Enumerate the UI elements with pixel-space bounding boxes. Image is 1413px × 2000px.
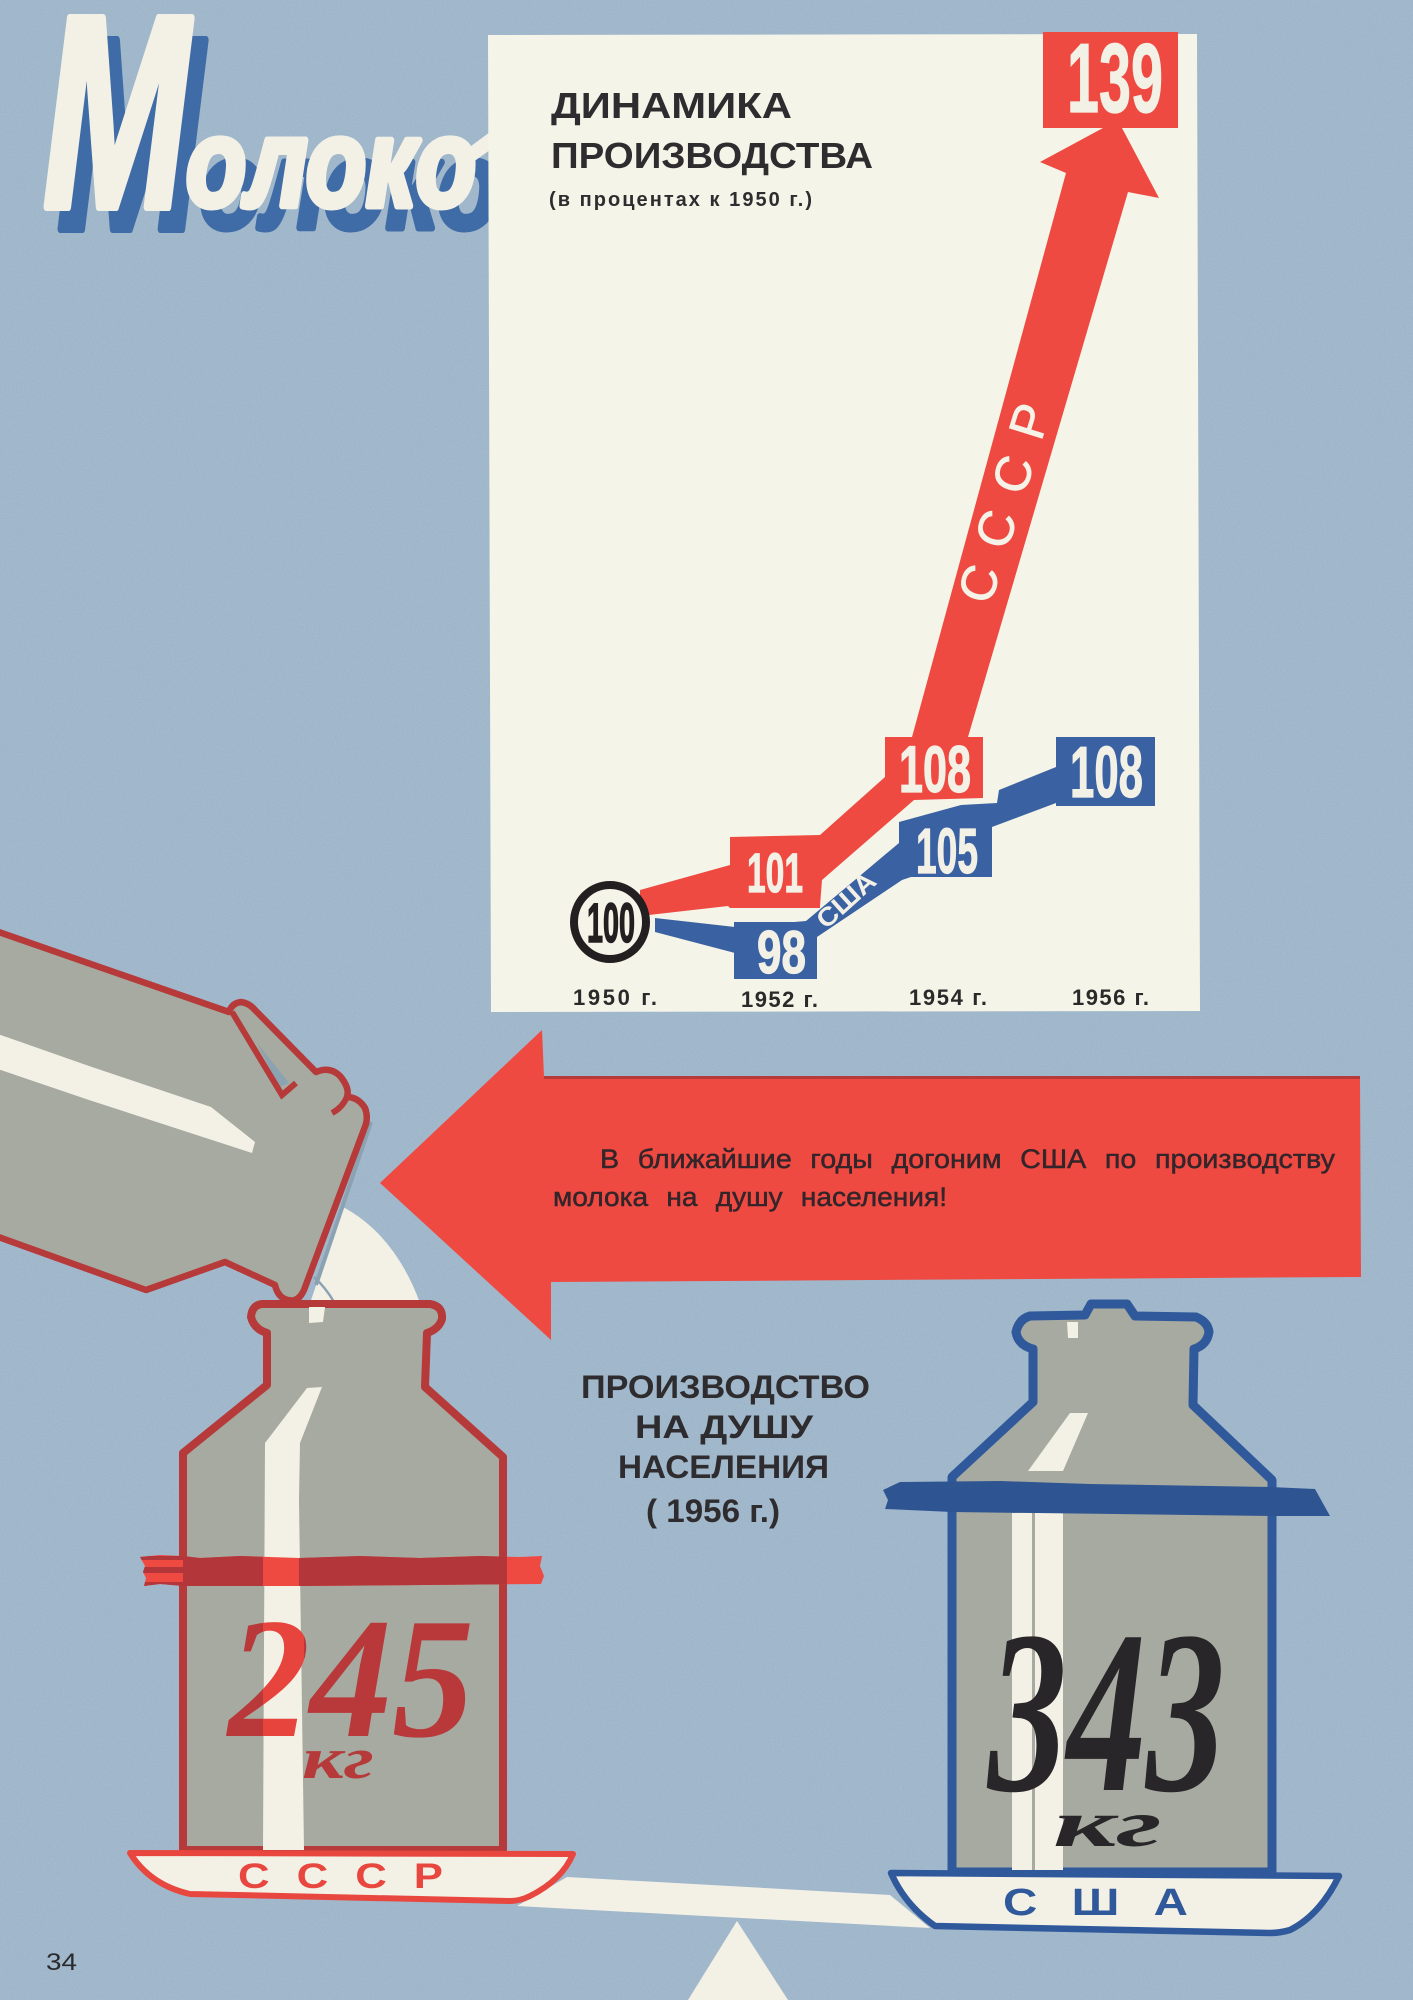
jar body [183, 1304, 503, 1850]
chart: USA line [655, 733, 1155, 986]
balance fulcrum [688, 1921, 788, 2000]
page number: 34 [46, 1949, 77, 1976]
thumb gap [257, 1043, 289, 1087]
per-capita production label: ( 1956 г.) [646, 1493, 780, 1529]
year axis labels: 1954 г. [909, 985, 987, 1010]
USSR plate [130, 1853, 573, 1901]
USSR value 101 [730, 837, 820, 908]
USA value 108 [1056, 733, 1155, 813]
per-capita production label [581, 1369, 870, 1529]
USSR band and arrow [640, 128, 1159, 916]
red slogan arrow [380, 1030, 1361, 1340]
per-capita production label: НАСЕЛЕНИЯ [618, 1449, 829, 1485]
balance beam [517, 1877, 930, 1928]
value 245: 245 [225, 1584, 474, 1774]
title shadow [57, 0, 500, 287]
start marker 100 [574, 885, 646, 959]
USSR plate: СССР [238, 1857, 443, 1896]
slogan text [553, 1144, 1336, 1212]
USA value 105: 105 [916, 815, 978, 887]
unit kg: кг [1053, 1788, 1162, 1861]
USA label: США [810, 865, 882, 934]
chart: USSR line [640, 23, 1178, 916]
USSR value 108 [885, 732, 983, 806]
USA value 108: 108 [1070, 733, 1143, 813]
USA plate: США [1003, 1881, 1188, 1924]
panel: production dynamics [488, 23, 1200, 1012]
hand pouring milk [0, 929, 371, 1301]
year axis labels: 1950 г. [573, 985, 657, 1010]
slogan text: молока на душу населения! [553, 1182, 947, 1212]
USA plate [891, 1873, 1339, 1933]
panel heading: ПРОИЗВОДСТВА [551, 135, 873, 176]
title shadow: олоко [200, 117, 500, 255]
panel background [488, 34, 1200, 1012]
hand shadow edge [316, 1122, 371, 1285]
title lettering: олоко [186, 95, 476, 233]
arrow top edge [544, 1076, 1360, 1079]
USSR value 108: 108 [899, 732, 971, 806]
USA band [655, 767, 1056, 979]
USA jar [883, 1304, 1339, 1933]
unit kg: кг [302, 1726, 374, 1791]
start marker 100: 100 [587, 891, 635, 954]
jar highlight [263, 1307, 325, 1850]
milk stream [310, 1207, 420, 1303]
USSR value 139 [1043, 23, 1178, 133]
USSR jar [130, 1304, 573, 1901]
USSR value 139: 139 [1067, 23, 1163, 133]
year axis labels: 1952 г. [741, 987, 818, 1012]
panel heading: ДИНАМИКА [551, 85, 792, 126]
per-capita production label: НА ДУШУ [635, 1409, 814, 1445]
USA value 105 [899, 815, 992, 887]
arrow shape [380, 1030, 1361, 1340]
USA value 98: 98 [757, 919, 806, 986]
jar body [952, 1304, 1272, 1872]
title lettering [43, 0, 490, 265]
value 343: 343 [987, 1584, 1225, 1841]
jar band [883, 1481, 1330, 1516]
arm [0, 929, 367, 1301]
USSR value 101: 101 [747, 841, 803, 904]
panel heading [551, 85, 873, 176]
jar band [140, 1555, 544, 1586]
panel subtitle: (в процентах к 1950 г.) [549, 189, 812, 211]
jar highlight [1012, 1322, 1088, 1870]
per-capita production label: ПРОИЗВОДСТВО [581, 1369, 870, 1405]
title: Молоко [43, 0, 500, 287]
slogan text: В ближайшие годы догоним США по производству [600, 1144, 1336, 1174]
thumb outline [232, 1012, 296, 1095]
USSR arrow label: СССР [947, 397, 1061, 609]
USA value 98 [734, 919, 817, 986]
finger notch [332, 1097, 347, 1113]
year axis labels: 1956 г. [1072, 985, 1149, 1010]
year axis labels [573, 985, 1149, 1012]
sleeve highlight [0, 1033, 255, 1153]
jar highlight divider [1032, 1513, 1035, 1870]
